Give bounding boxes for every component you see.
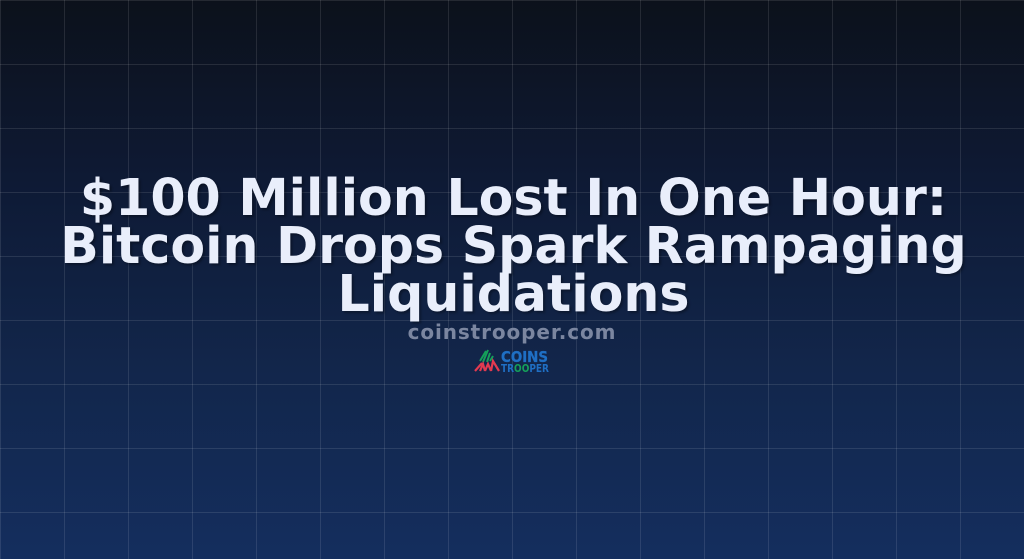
icon: coinstrooper logo xyxy=(474,348,549,374)
title xyxy=(60,168,967,324)
title: $100 Million Lost In One Hour: xyxy=(80,168,947,227)
source domain text: coinstrooper.com xyxy=(408,320,616,344)
title: Bitcoin Drops Spark Rampaging xyxy=(60,216,967,275)
title: Liquidations xyxy=(338,264,689,323)
